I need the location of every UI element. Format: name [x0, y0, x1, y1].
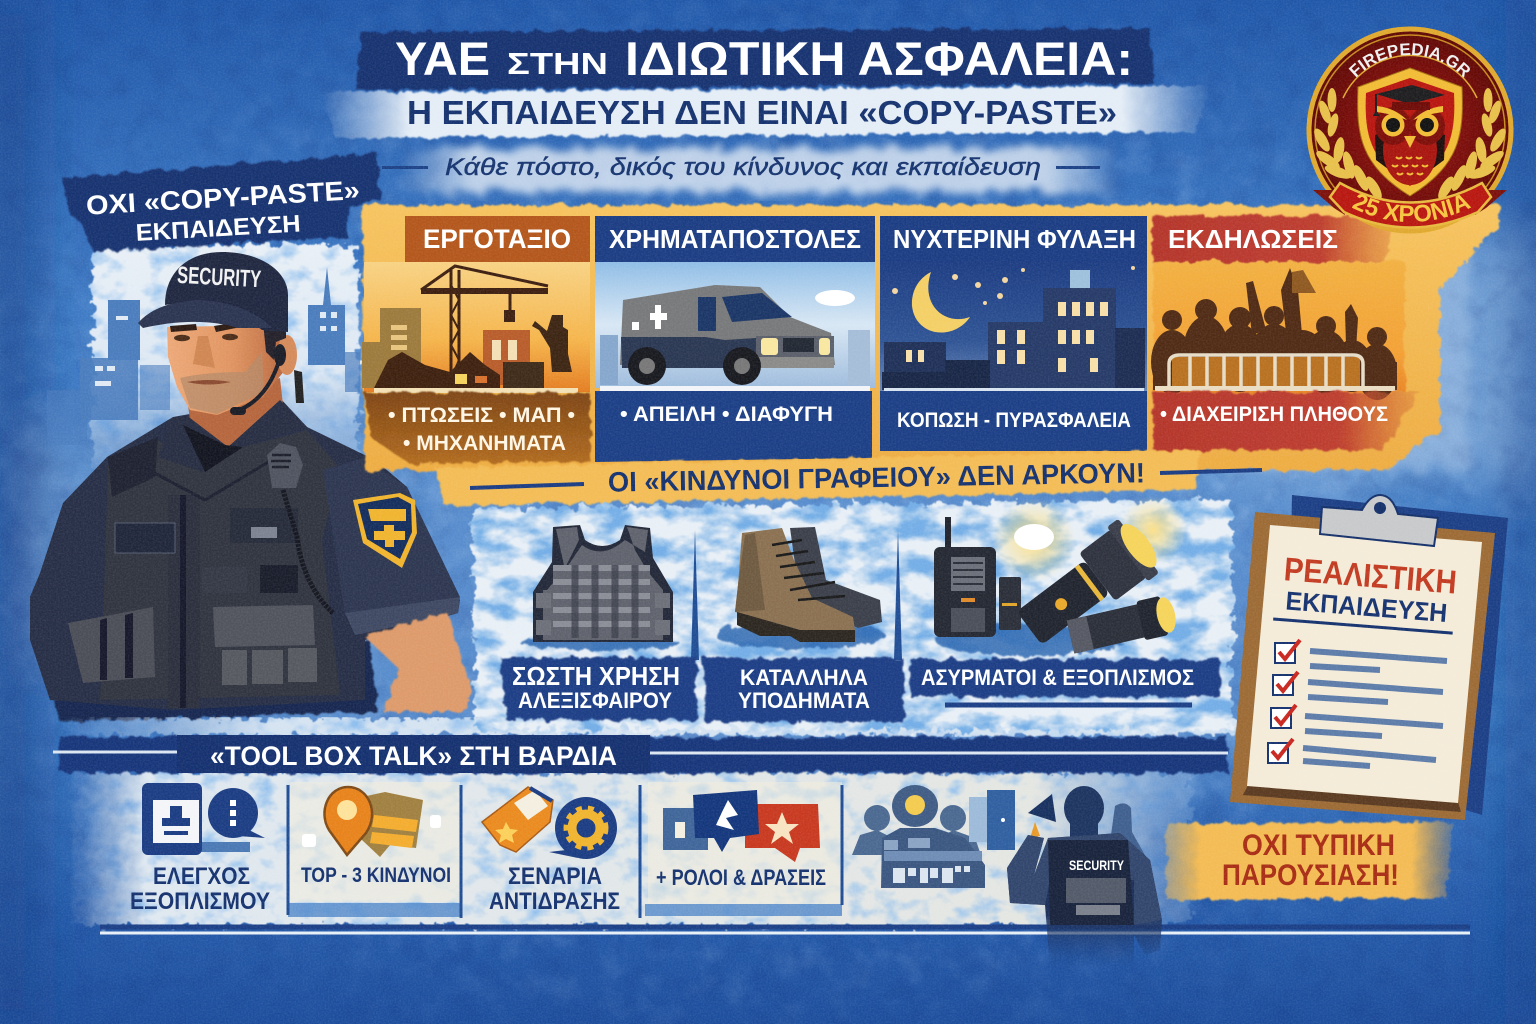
- banner shape: [63, 153, 380, 252]
- neck and collar: [188, 378, 283, 447]
- laurel: [1311, 88, 1509, 202]
- person behind: [1111, 803, 1146, 857]
- scene: [364, 262, 590, 392]
- moon: [912, 272, 970, 333]
- callout: ΟΧΙ ΤΥΠΙΚΗ: [1242, 829, 1395, 862]
- hazards text: • ΜΗΧΑΝΗΜΑΤΑ: [403, 432, 566, 455]
- clipboard heading: [1273, 550, 1458, 635]
- label: suitable footwear: ΥΠΟΔΗΜΑΤΑ: [738, 688, 870, 713]
- vest: [100, 430, 340, 700]
- card: response scenarios: [482, 785, 640, 918]
- vest name plate: [115, 523, 175, 553]
- left banner: [63, 153, 380, 252]
- team silhouettes: [852, 785, 1015, 888]
- card: equipment check: [130, 783, 270, 915]
- lower area: [595, 391, 872, 462]
- body: [1007, 833, 1162, 968]
- earpiece and mic: [274, 344, 286, 366]
- toolbox header: «TOOL BOX TALK» ΣΤΗ ΒΑΡΔΙΑ: [210, 741, 617, 771]
- buildings: [988, 288, 1116, 388]
- vest pouches: [68, 565, 317, 685]
- crane: [421, 266, 548, 378]
- panel: night guard: ΚΟΠΩΣΗ - ΠΥΡΑΣΦΑΛΕΙΑ: [897, 409, 1131, 432]
- callout: [1166, 822, 1452, 900]
- warning ribbon: [435, 450, 1262, 506]
- title: [356, 28, 1155, 90]
- checklist: [1268, 640, 1447, 766]
- dark base of figure: [40, 640, 378, 722]
- board: [1230, 512, 1495, 820]
- title text: ΥΑΕ: [395, 32, 490, 85]
- tagline: [382, 154, 1100, 181]
- label: correct vest use: ΣΩΣΤΗ ΧΡΗΣΗ: [512, 661, 680, 691]
- icon: pin and folder: [302, 787, 441, 857]
- outer ring: [1309, 29, 1511, 231]
- title band: [356, 28, 1155, 90]
- sleeve: [323, 458, 460, 615]
- toolbox strip background: [70, 772, 1190, 926]
- tagline: Κάθε πόστο, δικός του κίνδυνος και εκπαίδευση: [445, 154, 1041, 181]
- label: correct vest use: [500, 657, 697, 720]
- panel: equipment: [472, 496, 1232, 730]
- subtitle: [322, 86, 1210, 138]
- panel: cash transport: ΧΡΗΜΑΤΑΠΟΣΤΟΛΕΣ: [609, 224, 861, 254]
- clipboard heading: ΕΚΠΑΙΔΕΥΣΗ: [1285, 585, 1448, 628]
- label: radios and equipment: ΑΣΥΡΜΑΤΟΙ & ΕΞΟΠΛΙΣΜΟΣ: [921, 665, 1194, 690]
- shield: [1358, 68, 1462, 196]
- lower area: [880, 391, 1147, 451]
- left skyline panel: [47, 245, 360, 470]
- card: response scenarios: ΑΝΤΙΔΡΑΣΗΣ: [489, 888, 620, 915]
- ribbon text: 25 ΧΡΟΝΙΑ: [1352, 194, 1472, 222]
- clipboard heading: ΡΕΑΛΙΣΤΙΚΗ: [1283, 550, 1458, 601]
- face: [167, 325, 285, 415]
- owl: [1373, 85, 1445, 185]
- panel: construction site: ΕΡΓΟΤΑΞΙΟ: [423, 224, 571, 254]
- raised cone: [1028, 794, 1056, 822]
- stars: [892, 266, 1135, 305]
- guard from behind: SECURITY: [1069, 857, 1125, 873]
- crowd silhouettes: [1151, 268, 1397, 400]
- title text: [395, 32, 1133, 85]
- label: [130, 863, 270, 915]
- lower area: [1153, 392, 1420, 450]
- hazards text: • ΠΤΩΣΕΙΣ • ΜΑΠ •: [388, 404, 575, 427]
- banner text: ΟΧΙ «COPY-PASTE»: [85, 175, 361, 221]
- icon: speech bubbles: [663, 790, 820, 862]
- label: suitable footwear: ΚΑΤΑΛΛΗΛΑ: [740, 665, 868, 690]
- warning ribbon: ΟΙ «ΚΙΝΔΥΝΟΙ ΓΡΑΦΕΙΟΥ» ΔΕΝ ΑΡΚΟΥΝ!: [608, 457, 1145, 498]
- banner text: ΕΚΠΑΙΔΕΥΣΗ: [135, 210, 301, 247]
- card: roles and actions: [645, 782, 842, 916]
- clipboard: [1230, 495, 1508, 820]
- label: ΕΛΕΓΧΟΣ: [153, 863, 250, 890]
- panel: events: • ΔΙΑΧΕΙΡΙΣΗ ΠΛΗΘΟΥΣ: [1160, 403, 1388, 426]
- light strip below guard: [60, 718, 1236, 736]
- label: ΕΞΟΠΛΙΣΜΟΥ: [130, 888, 270, 915]
- scene: [1153, 262, 1405, 392]
- security guard: [30, 252, 472, 722]
- yellow backing of scenarios: [362, 205, 1500, 470]
- icon: boots: [735, 527, 882, 642]
- item shadows: [520, 621, 1125, 656]
- hazards text: [388, 404, 575, 455]
- shoulder radio: [267, 443, 303, 488]
- badge name: FIREPEDIA.GR: [1348, 43, 1470, 78]
- panel: night guard: [880, 216, 1147, 451]
- panel: cash transport: [595, 216, 875, 462]
- uniform torso: [30, 398, 460, 710]
- icon: vest: [533, 525, 673, 642]
- guard from behind: [1007, 786, 1162, 968]
- subtitle text: Η ΕΚΠΑΙΔΕΥΣΗ ΔΕΝ ΕΙΝΑΙ «COPY-PASTE»: [407, 94, 1117, 131]
- ribbon: [1313, 190, 1507, 215]
- scene: [595, 262, 875, 388]
- worker: [532, 315, 572, 372]
- label: correct vest use: ΑΛΕΞΙΣΦΑΙΡΟΥ: [518, 688, 672, 713]
- toolbox header: [53, 735, 1228, 773]
- security guard: SECURITY: [176, 262, 262, 293]
- scene: [880, 262, 1147, 394]
- bottom rule: [100, 927, 1470, 933]
- panel: construction site: [362, 216, 590, 464]
- title text: ΙΔΙΩΤΙΚΗ ΑΣΦΑΛΕΙΑ:: [625, 32, 1133, 85]
- lower area: [364, 393, 590, 464]
- rubble and ground: [374, 352, 500, 388]
- badge: [1306, 26, 1514, 234]
- icon: radio and flashlights: [934, 496, 1187, 657]
- card: roles and actions: + ΡΟΛΟΙ & ΔΡΑΣΕΙΣ: [656, 865, 826, 890]
- panel: events: ΕΚΔΗΛΩΣΕΙΣ: [1168, 224, 1338, 254]
- icon: id and bubble: [142, 783, 265, 855]
- panel: cash transport: • ΑΠΕΙΛΗ • ΔΙΑΦΥΓΗ: [620, 403, 833, 426]
- title text: ΣΤΗΝ: [507, 46, 608, 81]
- card: top 3 hazards: [288, 782, 462, 918]
- banner text: [85, 175, 362, 250]
- card: response scenarios: ΣΕΝΑΡΙΑ: [508, 863, 602, 890]
- panel: night guard: ΝΥΧΤΕΡΙΝΗ ΦΥΛΑΞΗ: [893, 224, 1136, 254]
- armoured van: [620, 285, 835, 385]
- shoulder badge: [353, 493, 417, 568]
- subtitle band: [322, 86, 1210, 138]
- callout: ΠΑΡΟΥΣΙΑΣΗ!: [1222, 859, 1399, 892]
- label: suitable footwear: [703, 658, 903, 722]
- cap: [165, 252, 288, 332]
- panel: events: [1151, 216, 1420, 450]
- header: [405, 216, 590, 262]
- label: radios and equipment: [910, 659, 1220, 705]
- barrier: [1172, 357, 1360, 387]
- clipboard shadow: [1290, 495, 1508, 815]
- card: top 3 hazards: TOP - 3 ΚΙΝΔΥΝΟΙ: [301, 864, 451, 887]
- icon: tag and gear bubble: [482, 787, 617, 859]
- clip: [1320, 495, 1438, 546]
- arm: [363, 613, 472, 712]
- paper: [1247, 525, 1482, 803]
